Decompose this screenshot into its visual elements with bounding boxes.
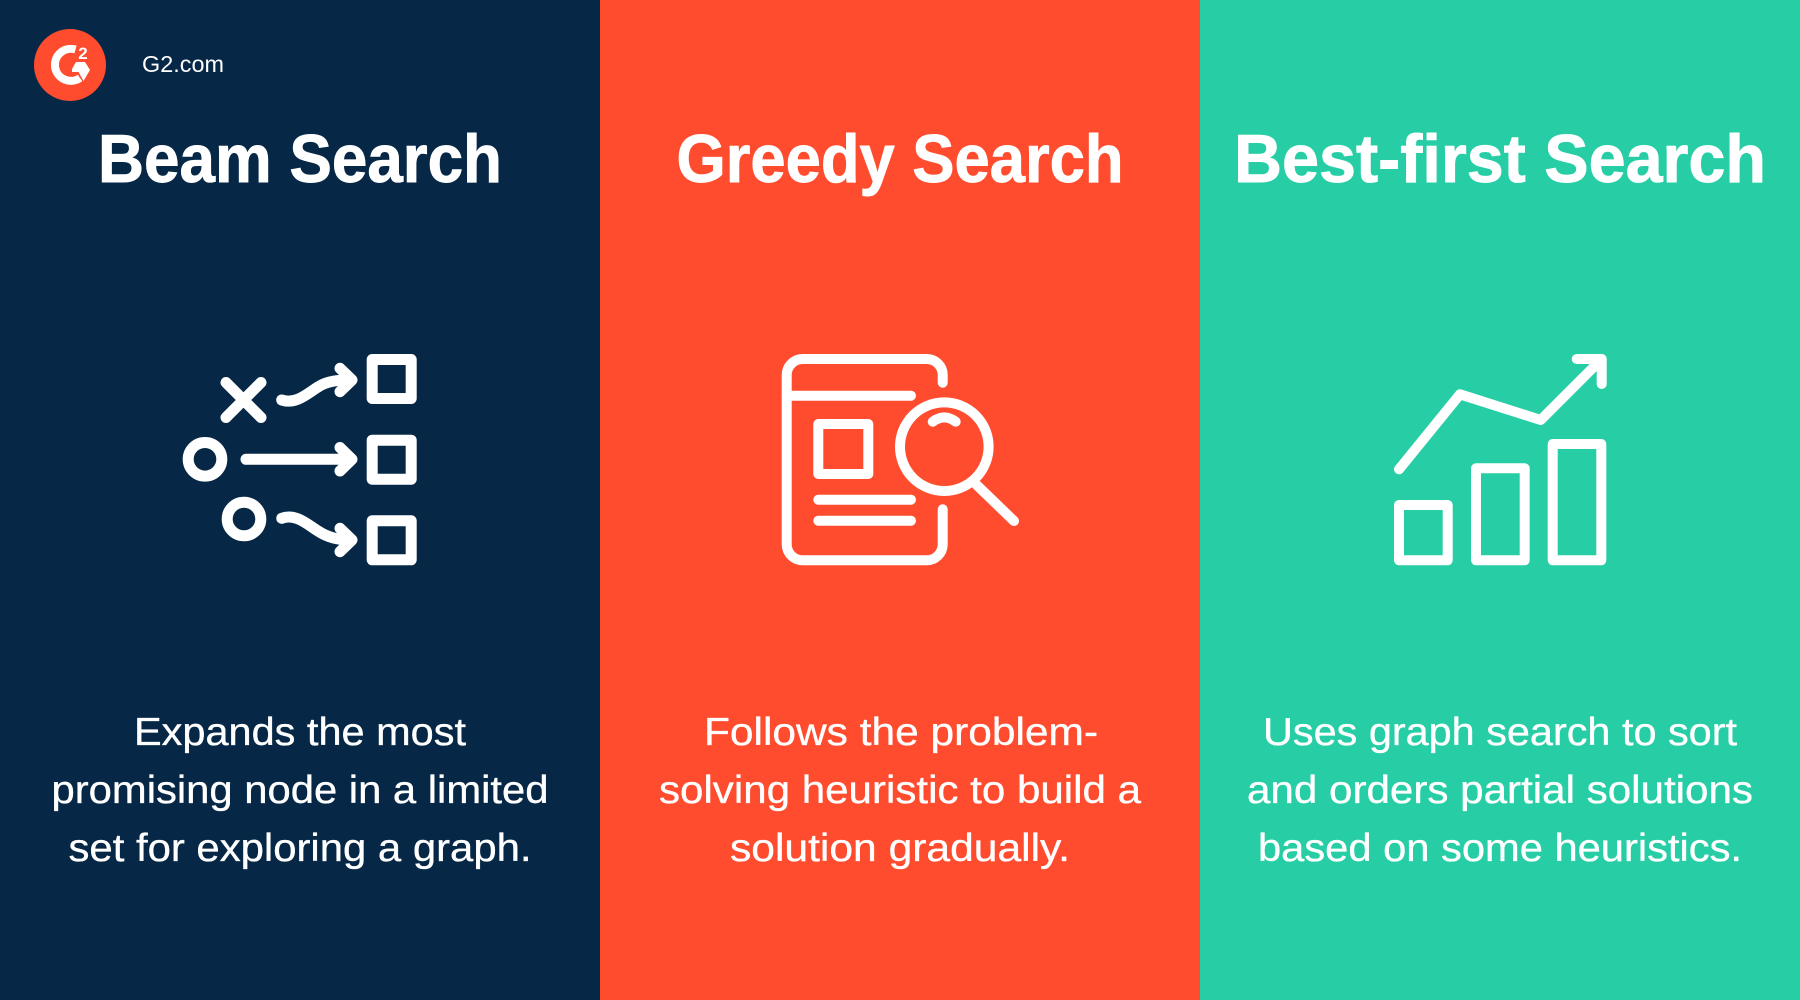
- description: beam search: set for exploring a graph.: [68, 827, 532, 870]
- icon: document with magnifier: [787, 359, 1014, 560]
- brand label: G2.com: [142, 51, 224, 77]
- description: best-first search: Uses graph search to sort: [1263, 711, 1737, 754]
- panel: best-first search: [1200, 0, 1800, 1000]
- description: greedy search: [659, 711, 1141, 870]
- icon: beam paths to squares: [188, 360, 411, 560]
- description: beam search: [52, 711, 548, 870]
- description: greedy search: solving heuristic to build a: [659, 769, 1141, 812]
- description: greedy search: Follows the problem-: [704, 711, 1098, 754]
- description: beam search: promising node in a limited: [52, 769, 548, 812]
- description: best-first search: and orders partial solutions: [1247, 769, 1753, 812]
- logo: G2 badge: 2: [78, 44, 88, 63]
- icon: rising line and bars: [1399, 359, 1602, 560]
- heading: best-first search: Best-first Search: [1234, 121, 1766, 197]
- logo: G2 badge: [34, 29, 106, 101]
- description: best-first search: based on some heuristics.: [1258, 827, 1742, 870]
- heading: beam search: Beam Search: [98, 121, 502, 197]
- description: greedy search: solution gradually.: [730, 827, 1070, 870]
- panel: beam search: [0, 0, 600, 1000]
- description: best-first search: [1247, 711, 1753, 870]
- description: beam search: Expands the most: [134, 711, 466, 754]
- heading: greedy search: Greedy Search: [676, 121, 1124, 197]
- panel: greedy search: [600, 0, 1200, 1000]
